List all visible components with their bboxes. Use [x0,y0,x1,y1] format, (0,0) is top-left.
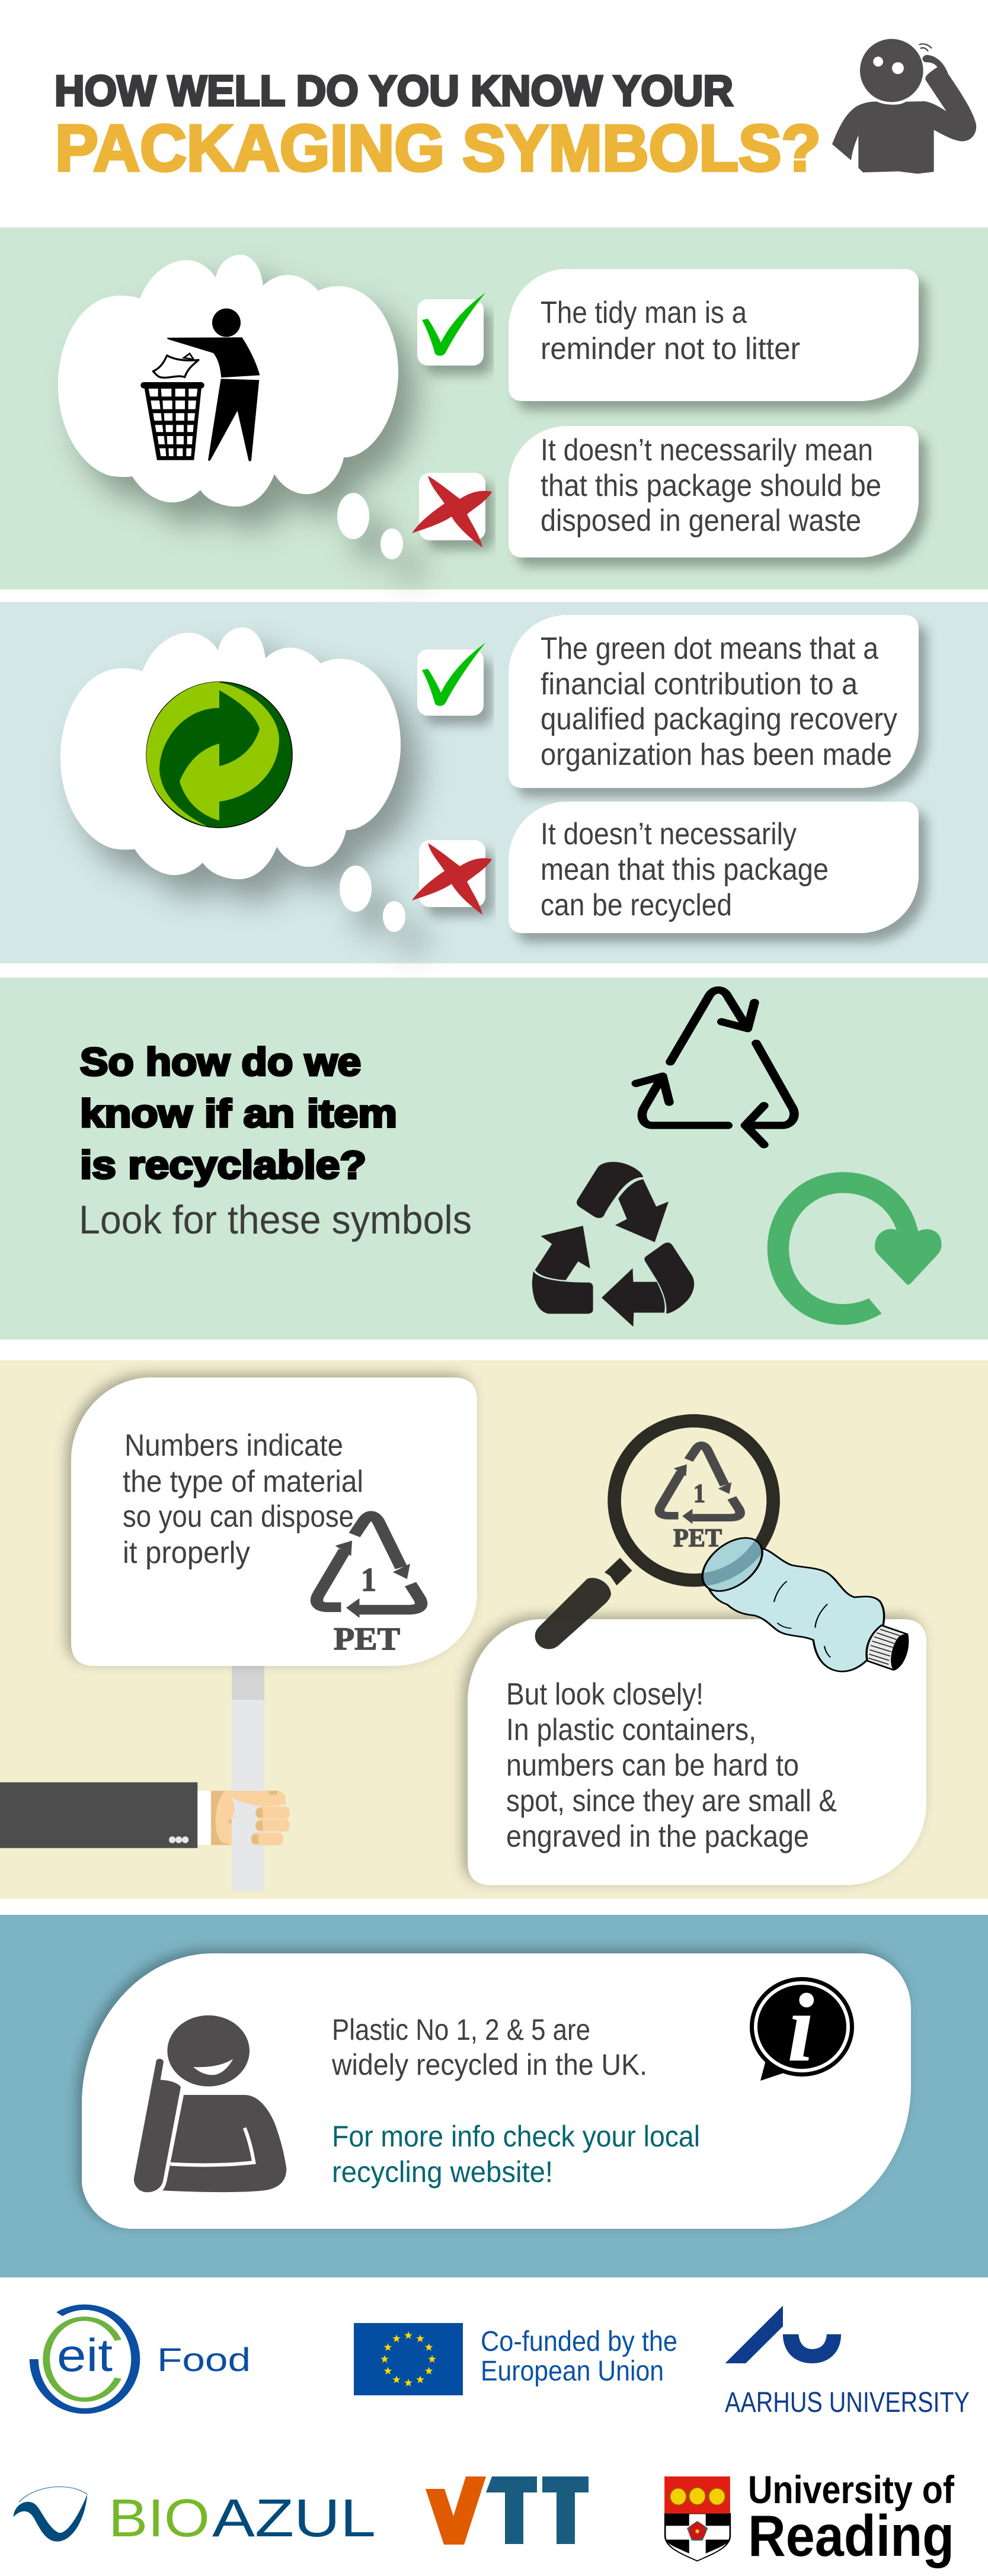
icon: PET recycling code: PET [334,1621,400,1657]
heading: So how do we [80,1040,361,1084]
title line 1: HOW WELL DO YOU KNOW YOUR [55,68,733,115]
speech bubble: green dot meaning: qualified packaging recovery [541,702,897,736]
speech bubble: what tidy man does not mean [509,426,919,558]
icon: info bubble: i [787,1973,814,2082]
logo: VTT [426,2476,589,2545]
heading [80,1040,397,1187]
speech bubble [82,1953,911,2229]
icon: info bubble [750,1973,854,2082]
logo: Aarhus University [725,2306,970,2418]
speech bubble: numbers indicate material: so you can dispose [123,1500,354,1534]
speech bubble: look closely [468,1619,926,1885]
icon: PET recycling code [316,1516,421,1657]
cross box [412,840,492,915]
hand holding the sign [0,1782,290,1848]
logo: EU flag and co-funding text: European Union [481,2356,664,2387]
speech bubble: look closely: numbers can be hard to [506,1748,799,1783]
panel: how to know if recyclable [0,978,988,1340]
text: more info: recycling website! [332,2155,553,2189]
panel: green dot [0,602,988,963]
logo: EU flag and co-funding text: Co-funded by the [481,2326,677,2357]
speech bubble: green dot meaning [509,615,919,788]
logo: Bioazul: BIO [108,2489,210,2548]
thought cloud [58,255,403,559]
speech bubble: numbers indicate material: Numbers indicate [124,1428,343,1463]
title line 2: PACKAGING SYMBOLS? [55,112,821,185]
logo: EU flag and co-funding text [354,2323,677,2395]
text: plastics widely recycled [331,2013,647,2081]
thought cloud [60,627,405,932]
logo: EIT Food: eit [57,2329,113,2381]
icon: green dot [146,682,292,828]
icon: outline recycling triangle [636,990,794,1145]
speech bubble: numbers indicate material: it properly [123,1536,250,1570]
sign pole [232,1666,264,1891]
speech bubble: look closely: engraved in the package [506,1819,809,1854]
icon: PET recycling code: 1 [361,1562,376,1598]
icon: thinking man [832,39,976,174]
logo: Bioazul [13,2487,376,2548]
icon: person on phone [134,2016,286,2192]
logo: EIT Food [34,2307,251,2411]
panel: numbers [0,1360,988,1899]
icon: plastic bottle [702,1537,909,1672]
text: more info [332,2120,700,2189]
speech bubble: green dot meaning: organization has been made [541,738,892,772]
icon: tidy man [140,309,260,462]
speech bubble: numbers indicate material [71,1377,477,1666]
panel: widely recycled plastics [0,1915,988,2277]
check box [417,293,485,366]
speech bubble: tidy man meaning: reminder not to litter [541,332,800,366]
text: plastics widely recycled: widely recycled in the UK. [331,2048,647,2081]
icon: mobius loop [532,1162,694,1327]
speech bubble: green dot meaning: financial contribution to a [541,667,858,701]
speech bubble: what green dot does not mean [509,802,919,933]
cross box [412,473,492,547]
speech bubble: tidy man meaning: The tidy man is a [541,296,747,330]
speech bubble: look closely: But look closely! [506,1677,704,1712]
speech bubble: numbers indicate material: the type of material [123,1465,363,1499]
logo: University of Reading: University of [748,2468,955,2511]
speech bubble: what tidy man does not mean: It doesn’t necessarily mean [541,433,873,467]
speech bubble: what tidy man does not mean: disposed in general waste [541,504,861,538]
icon: magnifying glass [535,1414,780,1649]
speech bubble: what green dot does not mean: can be recycled [541,888,732,922]
speech bubble: what green dot does not mean: It doesn’t necessarily [541,817,797,851]
text: more info: For more info check your local [332,2120,700,2153]
logo: University of Reading [664,2468,955,2568]
icon: widely recycled loop [768,1172,942,1325]
icon: magnifying glass: PET [673,1524,722,1552]
heading: know if an item [80,1091,397,1135]
subheading: Look for these symbols [79,1197,472,1242]
text: plastics widely recycled: Plastic No 1, 2 & 5 are [332,2013,590,2046]
speech bubble: what green dot does not mean: mean that this package [541,853,829,887]
speech bubble: tidy man meaning [509,269,919,401]
check box [417,643,485,716]
logo: EIT Food: Food [157,2341,251,2378]
panel: tidy man [0,228,988,589]
logo: Bioazul: AZUL [212,2489,376,2548]
icon: magnifying glass: 1 [693,1479,705,1508]
speech bubble: look closely: In plastic containers, [506,1713,756,1747]
heading: is recyclable? [80,1143,366,1187]
speech bubble: green dot meaning: The green dot means that a [541,632,878,666]
logo: University of Reading: Reading [748,2503,954,2568]
speech bubble: what tidy man does not mean: that this package should be [541,469,881,503]
header: title and thinking man [55,39,976,185]
speech bubble: look closely: spot, since they are small & [506,1784,837,1818]
